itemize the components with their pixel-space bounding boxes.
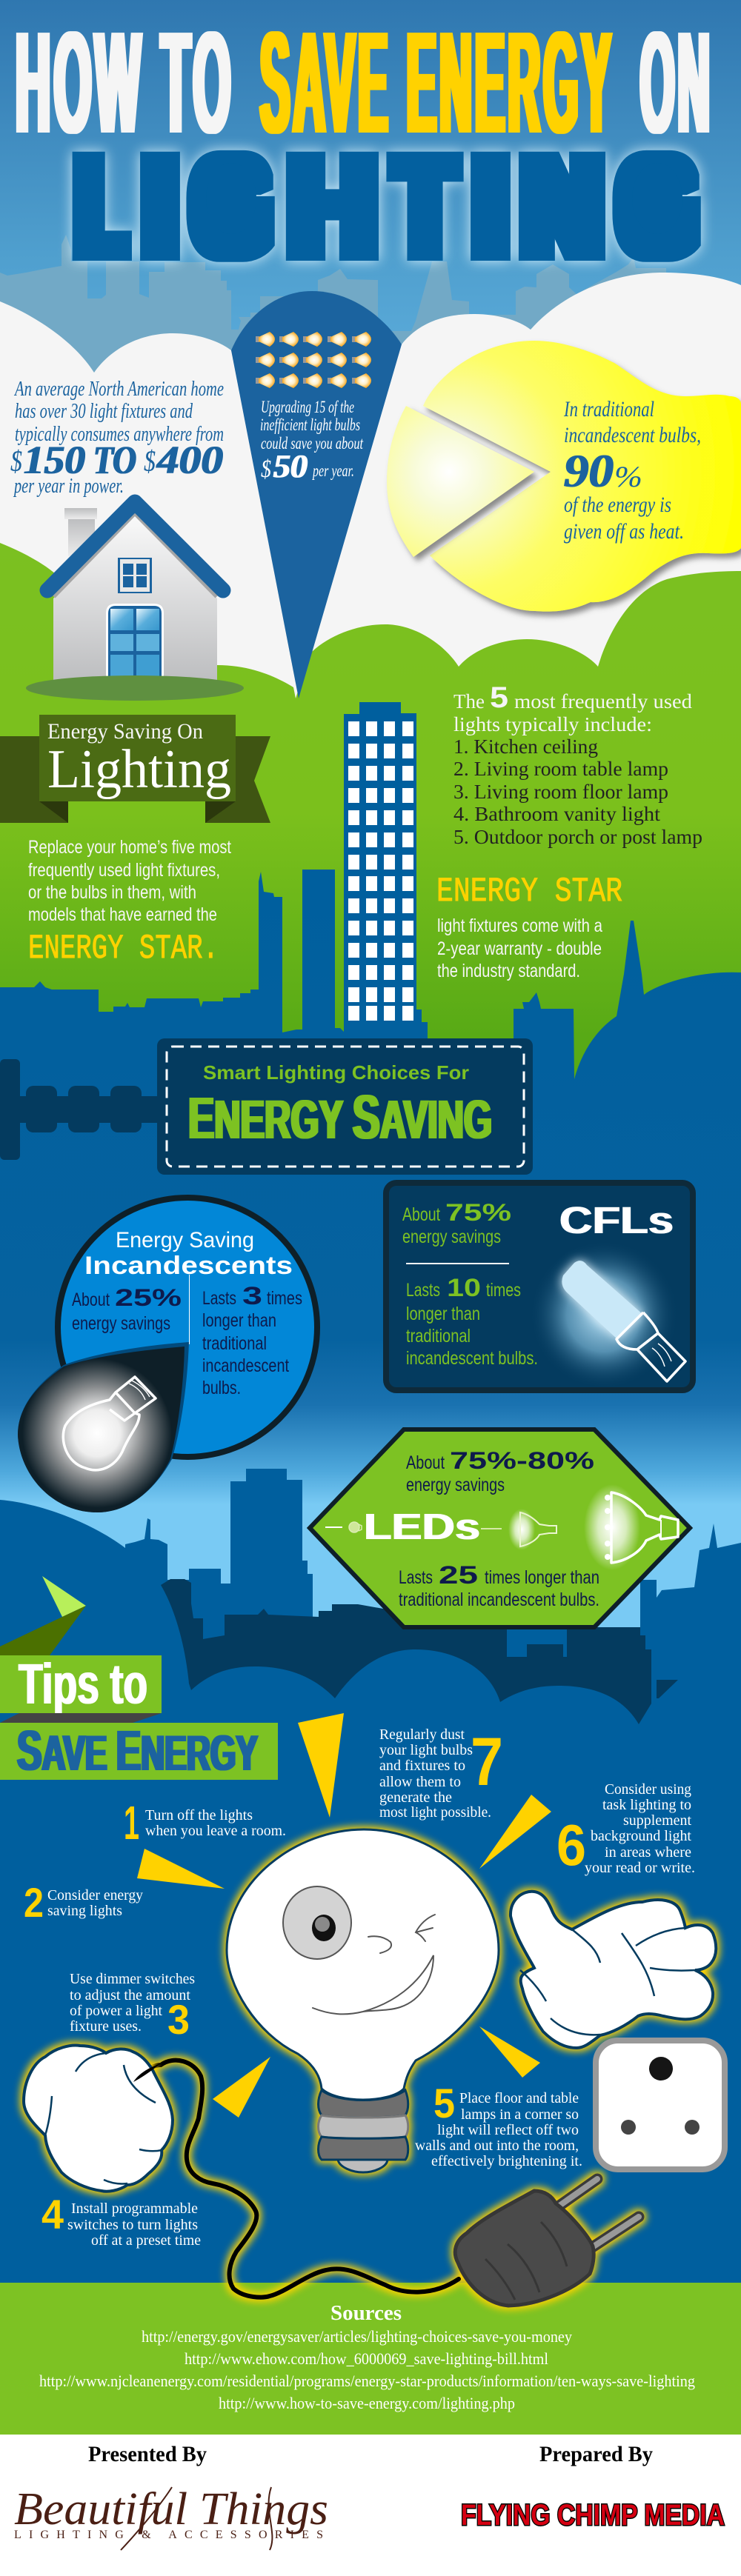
tip 7: and fixtures to [379, 1758, 465, 1774]
tip 1: when you leave a room. [145, 1823, 286, 1839]
panel: LEDs hexagon: LEDs [364, 1507, 480, 1547]
tip 4: 4 [41, 2191, 64, 2238]
tip 5: light will reflect off two [437, 2122, 579, 2138]
tip 7: generate the [379, 1789, 452, 1806]
text: average home fixtures and cost: 150 [24, 438, 85, 482]
green sources band [0, 2283, 741, 2435]
text: five most used lights list: The [453, 690, 485, 713]
text: replace fixtures: ENERGY STAR. [28, 930, 219, 968]
heading: Save Energy: SAVE ENERGY [17, 1719, 258, 1783]
sources list: http://www.ehow.com/how_6000069_save-lighting-bill.html [185, 2349, 548, 2368]
text: five most used lights list [453, 681, 702, 848]
funnel panel: upgrading bulbs [231, 291, 402, 698]
tip 6: 6 [556, 1812, 586, 1878]
panel: energy saving incandescents: Lasts [202, 1288, 236, 1309]
tip 5 [415, 2080, 582, 2169]
tip 4: Install programmable [71, 2200, 198, 2217]
pie body 90 percent [423, 341, 741, 612]
text: average home fixtures and cost: has over 30 light fixtures and [15, 400, 193, 423]
sources list: http://energy.gov/energysaver/articles/lighting-choices-save-you-money [142, 2327, 572, 2346]
panel: CFLs [386, 1183, 693, 1390]
text: average home fixtures and cost [10, 378, 224, 498]
text: energy star warranty: 2-year warranty - double [437, 938, 602, 959]
text: 90 percent heat: incandescent bulbs, [564, 423, 701, 447]
title: Lighting with glow [79, 130, 696, 283]
panel: energy saving incandescents: About [72, 1289, 110, 1310]
panel: CFLs: longer than [406, 1304, 480, 1324]
panel: energy saving incandescents: energy savings [72, 1313, 170, 1334]
icon: cord and plug [135, 2061, 639, 2306]
heading panel: Smart Lighting Choices [157, 1038, 533, 1175]
icon: glowing bulb [18, 1342, 189, 1512]
title: Lighting with glow: H [289, 130, 376, 283]
solid infill of heavy title letters [206, 163, 682, 237]
tip 6: your read or write. [585, 1860, 695, 1876]
tip 2: 2 [24, 1879, 44, 1926]
text: replace fixtures: Replace your home’s five most [28, 837, 231, 858]
panel: CFLs: CFLs [559, 1199, 674, 1241]
title: How to Save Energy on: HOW TO [16, 1, 234, 164]
heading: Tips to [0, 1652, 162, 1716]
panel: energy saving incandescents: longer than [202, 1310, 276, 1331]
tip 7 [379, 1724, 503, 1821]
tip 5: walls and out into the room, [415, 2138, 579, 2154]
panel: LEDs hexagon: 25 [439, 1561, 478, 1589]
heading panel: Smart Lighting Choices: ENERGY SAVING [188, 1082, 492, 1152]
text: upgrading saves $50: could save you about [261, 434, 363, 453]
tip 5: Place floor and table [459, 2090, 579, 2106]
icon: pointing glove [511, 1892, 716, 2048]
face: open eye [283, 1886, 351, 1959]
yellow rays around bulb [137, 1713, 551, 2118]
icon: glove holding cord [24, 2046, 173, 2192]
tip 4: switches to turn lights [67, 2217, 198, 2233]
logo: Beautiful Things: Beautiful Things [14, 2484, 328, 2535]
panel: energy saving incandescents: 25% [115, 1284, 182, 1311]
tip 6: in areas where [605, 1844, 691, 1861]
tip 3: 3 [167, 1996, 190, 2043]
tip 2: Consider energy [47, 1887, 143, 1903]
decorative green triangle light [42, 1576, 86, 1617]
text: upgrading saves $50 [260, 398, 363, 484]
decorative green triangle dark [0, 1606, 86, 1655]
title: Lighting with glow: G [619, 130, 696, 283]
tip 6: task lighting to [602, 1797, 691, 1813]
text: five most used lights list: most frequently used [514, 690, 693, 713]
face: wink nose and smile [313, 1915, 435, 2014]
panel: LEDs hexagon: 75%-80% [450, 1447, 594, 1474]
plug connector left of heading [0, 1059, 157, 1160]
text: 90 percent heat: given off as heat. [564, 519, 684, 544]
ribbon banner: Energy Saving On Lighting: Lighting [47, 739, 231, 800]
text: upgrading saves $50: Upgrading 15 of the [261, 398, 354, 416]
text: 90 percent heat: % [614, 460, 642, 493]
text: 90 percent heat: of the energy is [564, 493, 671, 517]
text: five most used lights list: 2. Living room table lamp [453, 758, 668, 780]
tip 4: off at a preset time [91, 2232, 201, 2249]
tip 5: 5 [433, 2080, 455, 2126]
tip 7: Regularly dust [379, 1726, 465, 1743]
panel: LEDs hexagon [310, 1429, 690, 1627]
panel: LEDs hexagon: Lasts [399, 1567, 433, 1588]
ribbon banner: Energy Saving On Lighting [0, 715, 270, 823]
tip 6 [556, 1781, 695, 1878]
character: smiling light bulb [227, 1829, 499, 2172]
tip 2 [24, 1879, 143, 1926]
sources list: http://www.njcleanenergy.com/residential/programs/energy-star-products/information/ten-ways-save-lighting [39, 2372, 695, 2390]
sources list [39, 2302, 695, 2412]
panel: LEDs hexagon: About [406, 1452, 445, 1473]
tip 7: 7 [471, 1724, 503, 1800]
text: upgrading saves $50: per year. [312, 461, 354, 480]
tip 7: allow them to [379, 1774, 461, 1790]
text: energy star warranty: the industry standard. [437, 961, 580, 981]
text: upgrading saves $50: 50 [273, 448, 308, 484]
text: replace fixtures: frequently used light fixtures, [28, 860, 220, 881]
text: upgrading saves $50: $ [261, 456, 271, 483]
text: five most used lights list: 1. Kitchen ceiling [453, 735, 598, 758]
tip 3: Use dimmer switches [70, 1971, 195, 1987]
mid-blue building block [507, 1627, 567, 1657]
text: average home fixtures and cost: 400 [156, 438, 223, 482]
tip 4 [41, 2191, 201, 2249]
logo: Beautiful Things: LIGHTING & ACCESSORIES [14, 2529, 323, 2541]
text: upgrading saves $50: inefficient light bulbs [260, 416, 360, 434]
tip 3: fixture uses. [70, 2018, 142, 2035]
panel: energy saving incandescents: 3 [242, 1282, 262, 1310]
panel: CFLs: incandescent bulbs. [406, 1348, 538, 1369]
icon: large LED bulb [584, 1484, 678, 1570]
text: five most used lights list: 3. Living room floor lamp [453, 781, 668, 803]
text: replace fixtures [28, 837, 231, 968]
tip 7: your light bulbs [379, 1742, 473, 1758]
icon: CFL bulb [562, 1261, 685, 1381]
tip 3: to adjust the amount [70, 1987, 190, 2003]
icon: wall outlet [596, 2041, 725, 2169]
text: average home fixtures and cost: per year in power. [13, 475, 124, 498]
prepared by label: Prepared By [539, 2442, 653, 2466]
text: average home fixtures and cost: $ [10, 444, 22, 478]
text: replace fixtures: or the bulbs in them, with [28, 882, 196, 903]
skyline: pale top silhouette [0, 235, 741, 518]
tip 6: supplement [623, 1812, 691, 1829]
panel: energy saving incandescents: traditional [202, 1333, 267, 1354]
panel: energy saving incandescents: bulbs. [202, 1378, 241, 1398]
panel: energy saving incandescents: Energy Saving [116, 1228, 254, 1252]
panel: CFLs: 75% [445, 1199, 511, 1226]
panel: energy saving incandescents: Incandescents [84, 1252, 293, 1280]
text: average home fixtures and cost: TO [93, 438, 136, 482]
green hills and lawn [0, 543, 741, 1089]
background: sky [0, 0, 741, 563]
text: replace fixtures: models that have earned the [28, 904, 217, 925]
panel: CFLs: energy savings [402, 1227, 501, 1247]
text: 90 percent heat: In traditional [563, 397, 654, 421]
title: Lighting with glow: I [143, 130, 177, 283]
panel: CFLs: Lasts [406, 1280, 440, 1301]
panel: CFLs: times [486, 1280, 521, 1301]
icon: medium LED bulb [508, 1509, 556, 1550]
tip 3 [70, 1971, 195, 2043]
text: energy star warranty [436, 872, 622, 981]
text: average home fixtures and cost: $ [144, 444, 156, 478]
pacman heat chart [387, 341, 741, 612]
dark lower skyline [161, 1579, 651, 1724]
title: Lighting with glow: G [193, 130, 270, 283]
panel: LEDs hexagon: energy savings [406, 1475, 505, 1495]
dark building in block [527, 1644, 563, 1659]
heading connector band [0, 1713, 162, 1723]
tip 5: effectively brightening it. [431, 2153, 582, 2169]
mid-blue lower skyline [0, 1469, 741, 2283]
title: Lighting with glow: T [396, 130, 453, 283]
tip 6: background light [591, 1828, 691, 1844]
tip 1 [124, 1796, 286, 1849]
sources list: http://www.how-to-save-energy.com/lighting.php [219, 2394, 515, 2412]
panel: energy saving incandescents [18, 1198, 317, 1512]
text: energy star warranty: ENERGY STAR [436, 872, 622, 911]
text: five most used lights list: 5 [490, 681, 508, 714]
icon: house [26, 502, 244, 701]
text: 90 percent heat [563, 397, 701, 544]
skyline: tower windows and blue city [0, 702, 741, 1704]
tip 1: 1 [124, 1796, 139, 1849]
tip 6: Consider using [605, 1781, 691, 1798]
text: five most used lights list: lights typically include: [453, 713, 652, 735]
title: Lighting with glow: N [522, 130, 602, 283]
ribbon banner: Energy Saving On Lighting: Energy Saving On [47, 719, 203, 744]
text: energy star warranty: light fixtures come with a [437, 915, 602, 936]
tower windows [348, 721, 413, 1021]
tip 2: saving lights [47, 1903, 122, 1919]
icon: bulb grid [256, 332, 371, 388]
panel: LEDs hexagon: times longer than [485, 1567, 599, 1588]
heading: Tips to: Tips to [19, 1652, 147, 1716]
text: five most used lights list: 4. Bathroom vanity light [453, 803, 661, 825]
panel: LEDs hexagon: traditional incandescent bulbs. [399, 1589, 599, 1610]
presented by label: Presented By [88, 2442, 207, 2466]
small distant bird shape [657, 1680, 678, 1698]
text: average home fixtures and cost: An average North American home [14, 378, 224, 401]
heading panel: Smart Lighting Choices: Smart Lighting Choices For [203, 1061, 469, 1084]
panel: CFLs: 10 [447, 1274, 481, 1302]
icon: small LED bulb [349, 1522, 362, 1532]
text: average home fixtures and cost: typically consumes anywhere from [15, 423, 224, 446]
tip 7: most light possible. [379, 1804, 491, 1821]
tip 3: of power a light [70, 2003, 162, 2019]
tip 5: lamps in a corner so [461, 2106, 579, 2123]
panel: CFLs: About [402, 1204, 440, 1225]
text: five most used lights list: 5. Outdoor porch or post lamp [453, 826, 702, 848]
sources list: Sources [330, 2302, 402, 2325]
panel: CFLs: traditional [406, 1326, 471, 1347]
title: Lighting with glow: L [79, 130, 123, 283]
pie slice 10 percent [387, 406, 534, 557]
tip 1: Turn off the lights [145, 1807, 253, 1823]
text: 90 percent heat: 90 [564, 444, 614, 497]
panel: energy saving incandescents: incandescent [202, 1355, 289, 1376]
white clouds [0, 273, 741, 711]
footer white panel [0, 2435, 741, 2576]
title: Lighting with glow: I [473, 130, 508, 283]
panel: energy saving incandescents: times [267, 1288, 302, 1309]
